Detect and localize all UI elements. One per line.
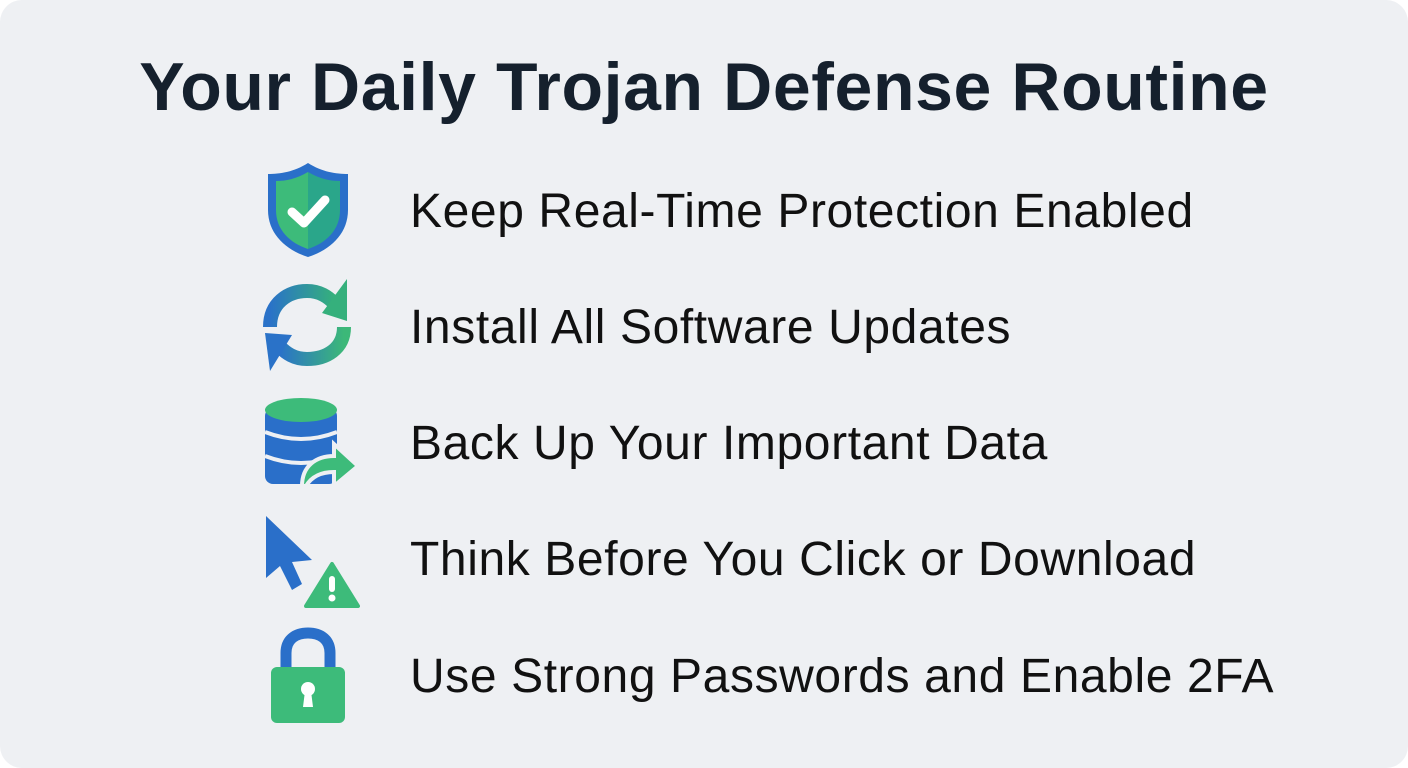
text: updates: Install All Software Updates [410,301,1011,354]
icon: database backup [265,398,355,484]
text: real-time protection: Keep Real-Time Protection Enabled [410,185,1194,238]
icon: cursor warning [266,516,360,608]
text: passwords: Use Strong Passwords and Enable 2FA [410,650,1274,703]
title: Your Daily Trojan Defense Routine [139,49,1269,125]
text: backup: Back Up Your Important Data [410,417,1048,470]
text: think before click: Think Before You Click or Download [410,533,1196,586]
icon: sync arrows [263,279,351,371]
icon: lock [271,628,345,723]
icon: shield [268,163,348,257]
